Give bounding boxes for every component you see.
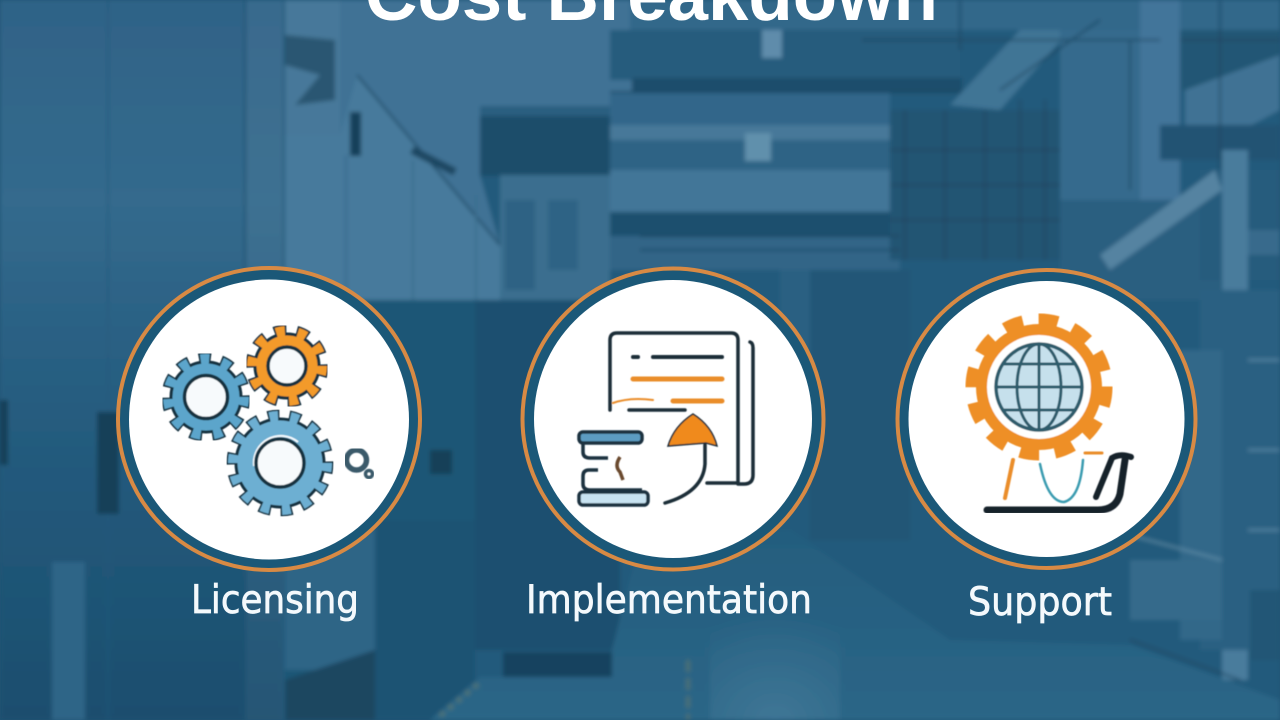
lower left mass xyxy=(285,300,475,720)
icon: support tools xyxy=(987,453,1131,510)
icon: small key xyxy=(346,450,372,478)
upper wall and hood xyxy=(285,0,640,245)
label: support: Support xyxy=(968,580,1112,625)
icon: books xyxy=(579,432,648,505)
panel: implementation xyxy=(522,268,824,623)
icon badge: implementation xyxy=(522,268,824,570)
icon: orange gear with globe xyxy=(972,320,1106,454)
label: licensing: Licensing xyxy=(191,578,359,623)
icon badge: support xyxy=(898,270,1196,568)
label: implementation: Implementation xyxy=(526,578,812,623)
icon: blue gear xyxy=(166,358,246,436)
icon badge: licensing xyxy=(118,268,420,570)
panel: licensing xyxy=(118,268,420,623)
factory centre xyxy=(610,30,960,80)
racks and tower xyxy=(890,110,1060,260)
lower racks xyxy=(810,270,910,540)
panel: support xyxy=(898,270,1196,625)
icon: arrow xyxy=(665,414,717,503)
dark handles on left cabinets xyxy=(0,400,8,465)
floor xyxy=(430,530,1280,720)
icon: orange gear xyxy=(250,330,324,402)
icon: document xyxy=(610,333,753,484)
icon: large blue gear xyxy=(232,414,328,512)
